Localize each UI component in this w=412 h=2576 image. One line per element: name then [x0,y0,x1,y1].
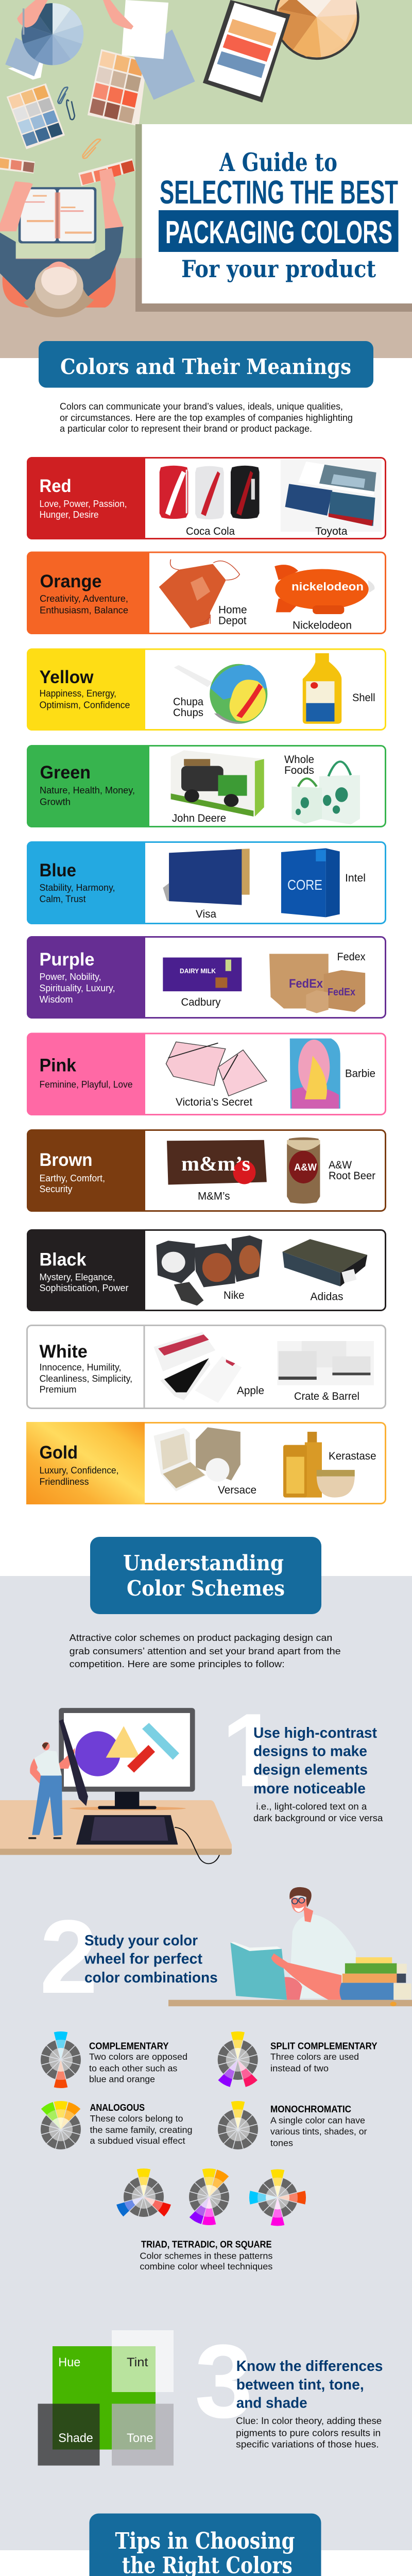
card: blue: Stability, Harmony, [39,883,115,893]
card: yellow: Happiness, Energy, [39,688,116,699]
icon: swatch card left [7,83,65,149]
intro text: color schemes: Attractive color schemes on product packaging design can [70,1633,332,1643]
card: red: Hunger, Desire [39,510,99,520]
card: yellow: Shell [352,692,375,704]
color wheel: split complementary: Three colors are used [270,2052,359,2062]
illustration: designer at monitor [0,1708,232,1863]
card: green: Whole [284,754,314,766]
intro text: color schemes: competition. Here are some principles to follow: [70,1659,285,1669]
card: gold [26,1422,385,1504]
chart: hue tint tone shade squares: Shade [58,2431,93,2445]
color wheel: complementary: COMPLEMENTARY [89,2041,169,2052]
card: green: Green [40,762,91,783]
heading: understanding color schemes [90,1537,321,1614]
principle 3 text: pigments to pure colors results in [236,2428,381,2438]
card: purple: Power, Nobility, [39,972,101,982]
card: gold: Versace [218,1484,256,1496]
principle 2 heading [84,1933,218,1986]
card: yellow: Chupa [173,696,203,708]
icon: m&m's bag [167,1140,267,1184]
card: green: Foods [284,765,314,776]
color wheel: split complementary: instead of two [270,2063,329,2073]
paper sheets [5,0,195,100]
icon: hands and pen [17,0,133,35]
big number 1: 1 [221,1692,280,1809]
icon: notebook [19,187,96,243]
icon: adidas shoebox [282,1239,367,1286]
card: blue [27,841,385,924]
card: green: John Deere [172,812,226,824]
card: red: Coca Cola [186,526,235,537]
card: black: Adidas [310,1291,343,1302]
principle 3 text: and shade [236,2395,307,2412]
color wheel: complementary: blue and orange [89,2074,155,2084]
card: black: Mystery, Elegance, [39,1272,115,1282]
hero illustration: designers at a table [0,0,358,317]
color wheels: triad, tetradic, square: TRIAD, TETRADIC, OR SQUARE [141,2239,272,2249]
card: white: White [39,1342,88,1362]
card: pink [27,1032,385,1115]
card: white: Innocence, Humility, [39,1362,122,1372]
card: black [27,1229,385,1311]
card: purple: FedEx [328,987,355,998]
hero background [0,0,412,358]
color wheel: split complementary: SPLIT COMPLEMENTARY [270,2041,377,2052]
color wheel: complementary: to each other such as [89,2063,178,2073]
heading: understanding color schemes: Color Schemes [127,1576,285,1601]
icon: colour strips [0,157,135,186]
icon: visa card box [163,849,250,905]
card: orange [27,551,385,634]
color wheel: complementary: Two colors are opposed [89,2052,187,2062]
icon: intel core box [281,848,340,917]
card: blue: CORE [287,877,322,893]
card: brown: A&W [329,1159,352,1171]
card: white: Crate & Barrel [294,1391,359,1402]
card: orange: Depot [218,615,247,626]
card: green [27,745,385,827]
card: purple: Spirituality, Luxury, [39,983,115,993]
color wheels: triad, tetradic, square [116,2168,306,2272]
big number 2: 2 [40,1899,98,2015]
card: red: Love, Power, Passion, [39,499,127,509]
icon: john deere toy box [171,750,264,817]
card: yellow: Chups [173,707,203,719]
color wheel: analogous: These colors belong to [90,2113,183,2124]
color wheel: monochromatic: tones [270,2138,293,2148]
intro text: colors: or circumstances. Here are the top examples of companies highlighting [60,413,353,423]
card: brown: Security [39,1184,72,1194]
icon: orange colour wheel [275,0,358,59]
heading: colors and their meanings: Colors and Their Meanings [60,354,351,379]
icon: cadbury bar [163,957,242,991]
icon: apple iphone boxes [153,1332,242,1403]
icon: chupa chups lollipop [174,664,267,724]
color wheel: complementary [41,2031,187,2088]
card: orange: nickelodeon [291,580,364,593]
icon: tablet with colour bars [203,0,290,103]
color wheel: analogous: the same family, creating [90,2125,193,2135]
chart: hue tint tone shade squares [38,2330,174,2466]
chart: hue tint tone shade squares: Hue [58,2355,80,2369]
color wheel: analogous [41,2101,193,2149]
card: gold: Luxury, Confidence, [39,1465,118,1476]
color wheel: monochromatic [218,2101,367,2149]
card: pink: Pink [39,1055,77,1076]
card: red: Red [39,476,71,496]
color wheels: triad, tetradic, square: Color schemes in these patterns [140,2250,273,2261]
section background: color schemes [0,1576,412,2550]
card: red [27,457,385,539]
intro text: colors: a particular color to represent their brand or product package. [60,423,312,434]
icon: nickelodeon blimp [274,565,374,614]
card: red: Toyota [315,526,348,537]
card: orange: Home [218,604,247,616]
card: white: Apple [237,1385,264,1397]
color wheel: monochromatic: A single color can have [270,2115,365,2125]
card: purple: Cadbury [181,996,221,1008]
card: purple: Fedex [337,951,366,963]
principle 3 text [236,2358,383,2449]
big number 3: 3 [195,2323,253,2440]
card: brown: Root Beer [329,1170,375,1182]
card: purple [27,936,385,1019]
icon: victoria's secret boxes [166,1042,267,1096]
illustration: person reading a book [168,1887,412,2006]
principle 2 heading: Study your color [84,1933,198,1949]
card: brown: m&m’s [181,1152,250,1175]
card: brown [27,1129,385,1212]
card: gold: Kerastase [329,1450,376,1462]
color wheels: triad, tetradic, square: combine color wheel techniques [140,2261,273,2272]
icon: home depot apron [159,560,239,629]
card: pink: Victoria’s Secret [176,1096,252,1108]
card: orange: Enthusiasm, Balance [40,605,128,615]
intro text: colors: Colors can communicate your brand’s values, ideals, unique qualities, [60,401,343,412]
card: black: Sophistication, Power [39,1283,129,1293]
card: brown: A&W [294,1162,317,1173]
color wheel: monochromatic: various tints, shades, or [270,2126,367,2137]
card: purple: DAIRY MILK [180,967,216,975]
color wheel: analogous: a subdued visual effect [90,2136,185,2146]
chart: hue tint tone shade squares: Tint [127,2355,148,2369]
principle 1 text: more noticeable [253,1781,366,1797]
icon: crate and barrel gift boxes [277,1341,374,1385]
card: purple: Wisdom [39,994,73,1005]
card: gold: Friendliness [39,1477,89,1487]
card: yellow: Yellow [39,667,94,687]
icon: nike boxes and balls [157,1235,262,1306]
principle 1 text: i.e., light-colored text on a [256,1801,367,1811]
principle 1 text: designs to make [253,1743,367,1760]
card: orange: Creativity, Adventure, [40,594,128,604]
white title panel with shadow [135,124,412,312]
icon: barbie doll box [290,1039,340,1109]
card: blue: Intel [345,872,366,884]
icon: blue colour wheel [22,3,83,65]
card: purple: Purple [39,950,95,970]
card: blue: Calm, Trust [39,894,85,904]
color wheel: analogous: ANALOGOUS [90,2103,145,2113]
icon: shell oil bottle [303,653,341,724]
icon: a&w can [287,1138,320,1204]
icon: paperclips [58,87,100,158]
card: black: Nike [224,1290,244,1301]
card: purple: FedEx [289,977,323,991]
principle 2 heading: color combinations [84,1970,218,1986]
principle 1 text: dark background or vice versa [253,1813,384,1823]
card: white [27,1325,385,1409]
color wheel: monochromatic: MONOCHROMATIC [270,2104,351,2114]
card: blue: Visa [196,908,216,920]
card: pink: Barbie [345,1067,375,1080]
principle 1 text [253,1725,384,1823]
icon: coca cola cans [160,466,260,519]
principle 3 text: between tint, tone, [236,2377,364,2393]
color wheel: split complementary [218,2031,377,2088]
heading: tips in choosing the right colors: Tips in Choosing [115,2528,295,2554]
card: pink: Feminine, Playful, Love [39,1079,133,1090]
card: blue: Blue [39,860,76,880]
card: green: Nature, Health, Money, [40,785,135,795]
card: gold: Gold [39,1443,78,1463]
icon: versace boxes [153,1427,241,1492]
icon: whole foods bags [291,761,360,824]
card: brown: M&M’s [198,1190,230,1202]
chart: hue tint tone shade squares: Tone [127,2431,153,2445]
card: orange: Orange [40,571,102,591]
card: brown: Earthy, Comfort, [39,1173,105,1183]
card: black: Black [39,1250,87,1269]
heading: tips in choosing the right colors [90,2514,321,2576]
principle 3 text: Know the differences [236,2358,383,2375]
title [159,147,399,283]
icon: kerastase bottles [283,1432,355,1498]
principle 1 text: design elements [253,1762,368,1778]
principle 1 text: Use high-contrast [253,1725,377,1741]
title: A Guide to [219,147,337,177]
icon: swatch card centre [88,49,147,126]
principle 3 text: specific variations of those hues. [236,2439,379,2449]
intro text: colors [60,401,353,434]
card: white: Premium [39,1384,76,1395]
principle 2 heading: wheel for perfect [84,1951,202,1968]
card: yellow: Optimism, Confidence [39,700,130,710]
intro text: color schemes: grab consumers’ attention and set your brand apart from the [70,1646,341,1656]
intro text: color schemes [70,1633,341,1669]
card: yellow [27,648,385,731]
icon: fedex boxes [269,954,365,1013]
card: brown: Brown [39,1150,93,1170]
card: green: Growth [40,796,71,807]
icon: toyota brochure [281,460,382,532]
heading: colors and their meanings [39,341,373,387]
illustration: person seen from above [0,168,124,317]
title: For your product [181,255,376,283]
card: white: Cleanliness, Simplicity, [39,1374,132,1384]
heading: understanding color schemes: Understanding [123,1551,284,1575]
principle 3 text: Clue: In color theory, adding these [236,2416,382,2426]
card: orange: Nickelodeon [293,619,352,632]
